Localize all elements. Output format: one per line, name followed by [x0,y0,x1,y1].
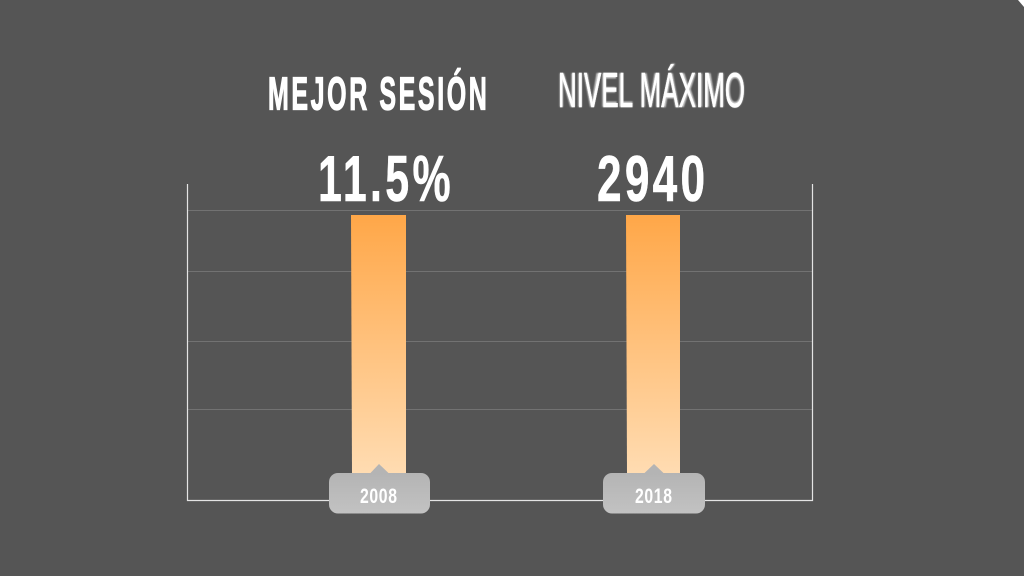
chart axes [188,184,812,500]
callout: 2008 [329,464,430,514]
heading: nivel máximo [558,64,745,118]
bar: 2008 [351,215,406,474]
heading: nivel máximo: NIVEL MÁXIMO [558,64,745,118]
heading: mejor sesión: MEJOR SESIÓN [268,67,487,119]
callout: 2018: 2018 [635,484,672,508]
callout: 2008: 2008 [360,484,397,508]
value: 2940: 2940 [597,143,705,215]
value: 11.5%: 11.5% [318,142,451,215]
bar: 2018 [626,215,680,474]
heading: nivel máximo: NIVEL MÁXIMO [558,64,745,118]
callout: 2018 [603,464,705,514]
